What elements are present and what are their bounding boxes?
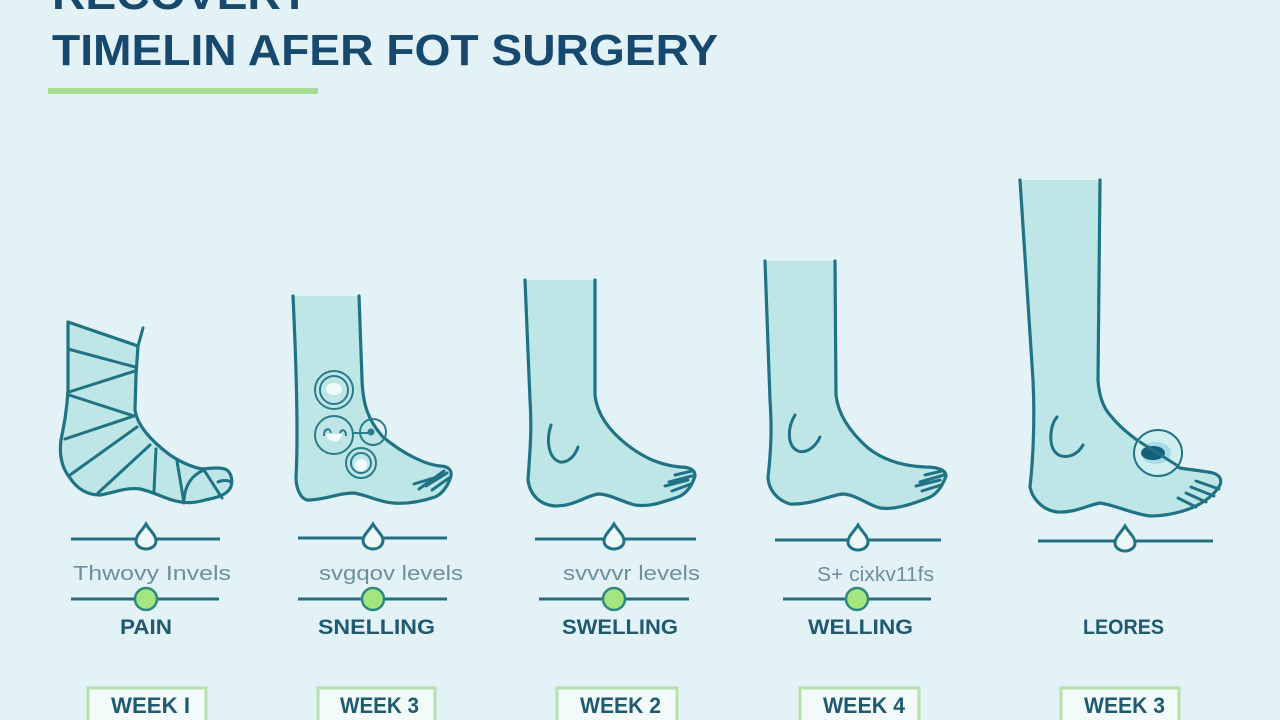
week badge 1 [88,688,206,720]
week badge 1: WEEK I [111,693,190,718]
level captions: svvvvr levels [563,563,700,585]
week badge 3: WEEK 2 [580,693,661,718]
symptom labels: SWELLING [562,616,678,639]
symptom labels: PAIN [120,616,172,639]
week badge 5 [1061,688,1179,720]
illustration: bandaged foot week 1 [60,322,232,503]
illustration: foot with highlighted area week 3 [1020,180,1221,516]
indicator row: drop sliders [71,524,1213,551]
illustration: foot week 2 column three [525,280,695,506]
illustration: foot week 4 [765,261,946,508]
symptom labels [120,616,1164,639]
indicator row: green dot sliders [71,588,931,610]
level captions: svgqov levels [319,563,463,585]
level captions: S+ cixkv11fs [817,564,934,586]
symptom labels: WELLING [808,616,913,639]
title underline [48,88,318,94]
week badge 3 [557,688,677,720]
illustration: foot with swelling markers week 2 [293,296,451,503]
title [52,0,718,75]
level captions [73,563,934,586]
swelling markers [315,371,386,478]
symptom labels: SNELLING [318,616,435,639]
symptom labels: LEORES [1083,616,1164,639]
week badge 2: WEEK 3 [340,693,419,718]
highlighted joint marker [1134,430,1182,476]
week badge 4: WEEK 4 [823,693,906,718]
week badge 2 [318,688,435,720]
title: TIMELIN AFER FOT SURGERY [52,26,718,75]
week badge 4 [800,688,919,720]
week badge 5: WEEK 3 [1084,693,1165,718]
level captions: Thwovy Invels [73,563,231,585]
